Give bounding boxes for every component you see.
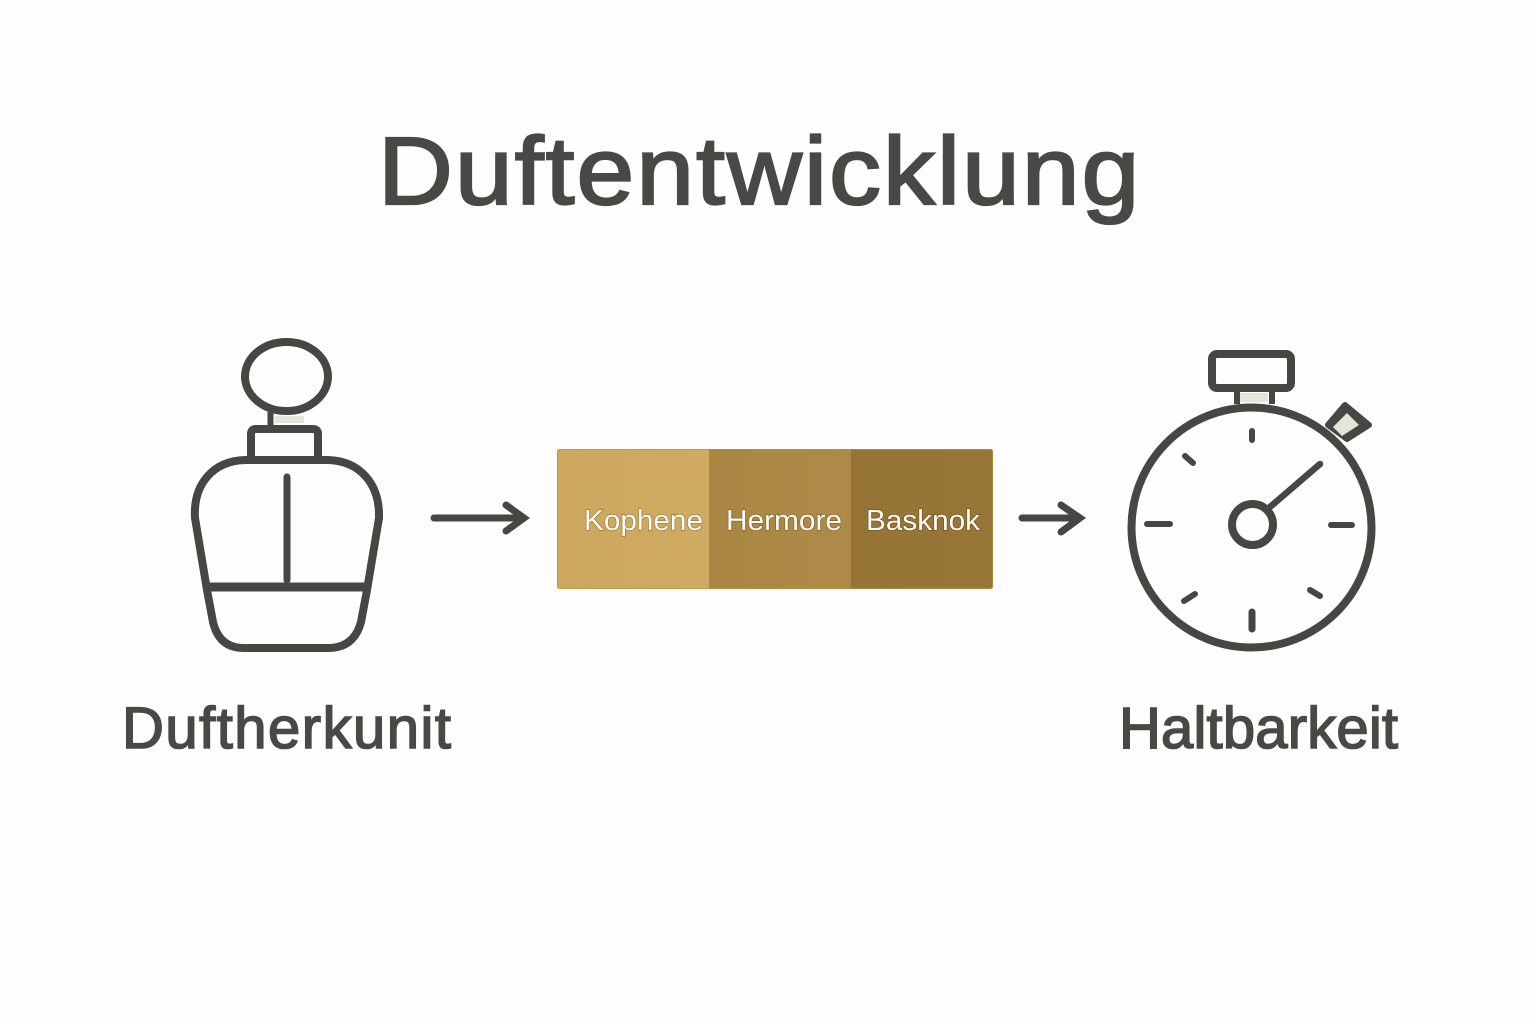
arrow: origin to notes [434,505,524,531]
note: Hermore: Hermore [726,505,842,537]
icon: stopwatch [1132,354,1372,648]
note: Kophene: Kophene [584,505,703,537]
arrow: notes to longevity [1022,505,1080,532]
title: Duftentwicklung [378,118,1141,225]
scent notes bar [557,449,993,589]
note: Basknok: Basknok [866,505,981,537]
icon: perfume bottle [195,342,379,648]
label: Duftherkunit: Duftherkunit [122,696,451,761]
label: Haltbarkeit: Haltbarkeit [1119,696,1398,761]
